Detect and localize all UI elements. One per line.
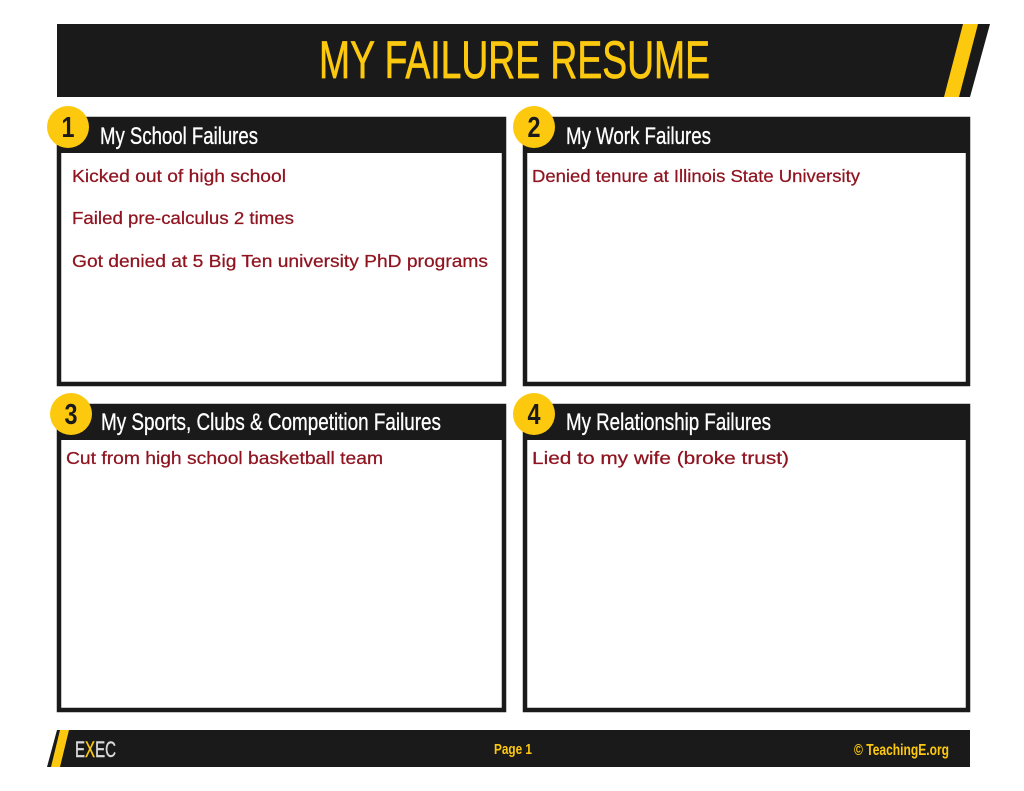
handwritten entries: school: Kicked out of high school <box>72 166 286 186</box>
panel: school failures: My School Failures <box>100 123 258 150</box>
panel: relationship failures <box>513 393 970 710</box>
footer copyright: © TeachingE.org <box>854 742 949 759</box>
title banner <box>57 24 990 97</box>
handwritten entries: school: Failed pre-calculus 2 times <box>72 208 294 228</box>
panel: sports, clubs and competition failures: My Sports, Clubs & Competition Failures <box>101 409 441 436</box>
panel: sports, clubs and competition failures <box>50 393 506 710</box>
title: MY FAILURE RESUME <box>319 31 710 90</box>
panel: relationship failures: My Relationship Failures <box>566 409 771 436</box>
handwritten entry: relationship: Lied to my wife (broke trust) <box>532 448 789 468</box>
footer bar <box>47 730 970 767</box>
panel: work failures: 2 <box>528 112 540 144</box>
panel: relationship failures: 4 <box>528 399 540 431</box>
panel: sports, clubs and competition failures: 3 <box>64 399 78 431</box>
handwritten entries: school: Got denied at 5 Big Ten university PhD programs <box>72 251 488 271</box>
panel: work failures: My Work Failures <box>566 123 711 150</box>
footer page number: Page 1 <box>494 741 532 758</box>
panel: work failures <box>513 106 970 384</box>
panel: school failures: 1 <box>62 112 74 144</box>
handwritten entries: school <box>72 166 488 271</box>
handwritten entry: work: Denied tenure at Illinois State University <box>532 166 860 186</box>
handwritten entry: sports: Cut from high school basketball team <box>66 448 383 468</box>
footer brand: EXEC <box>75 737 116 762</box>
panel: school failures <box>47 106 506 384</box>
